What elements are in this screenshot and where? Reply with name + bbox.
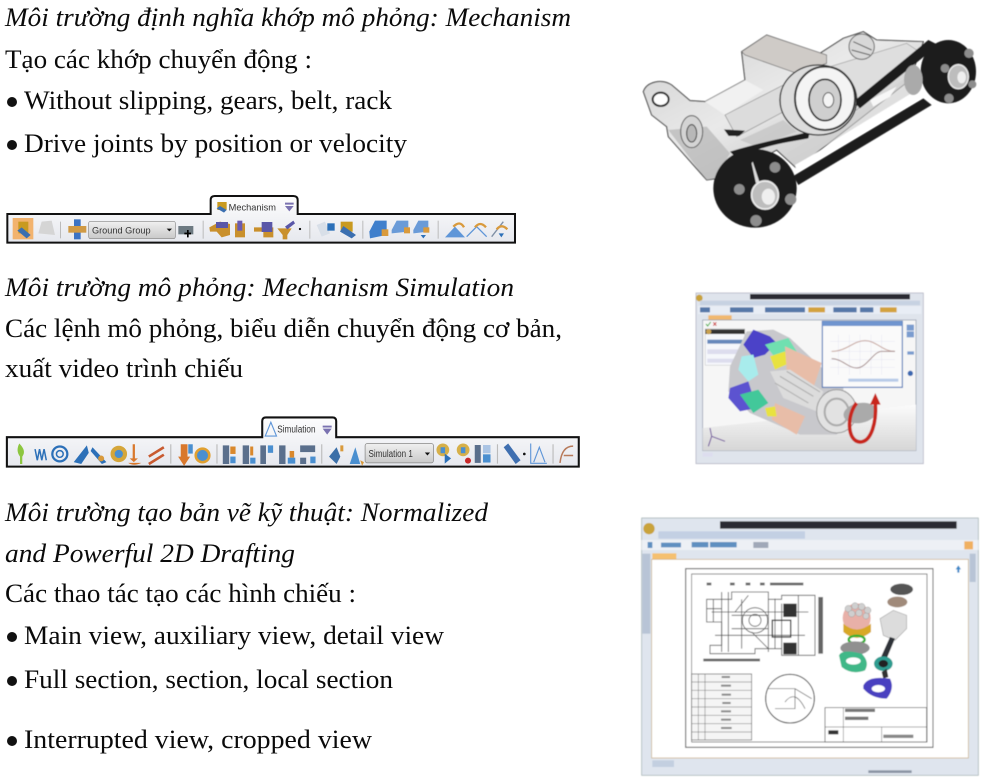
motor — [728, 330, 847, 435]
toolbar: Mechanism — [7, 196, 515, 243]
axes — [708, 428, 725, 446]
heading: Simulation: Môi trường mô phỏng: Mechanism Simulation — [4, 273, 514, 302]
description line 2: xuất video trình chiếu — [5, 354, 243, 383]
section view — [707, 592, 815, 655]
section 1 text: Mechanism — [4, 3, 571, 158]
combo: Ground Group — [89, 221, 175, 239]
small pulley — [921, 40, 976, 103]
chart window — [822, 321, 902, 387]
heading: Drafting line 2: and Powerful 2D Drafting — [5, 539, 295, 568]
detail circle — [766, 674, 814, 723]
combo: Simulation 1: Simulation 1 — [368, 449, 413, 460]
bullet: drive joints: Drive joints by position or velocity — [24, 129, 407, 158]
toolbar: Simulation — [7, 417, 579, 467]
image: drafting software window — [642, 518, 978, 775]
description line 1: Các lệnh mô phỏng, biểu diễn chuyển động cơ bản, — [5, 314, 562, 343]
dialog panel — [705, 329, 745, 365]
heading: Mechanism: Môi trường định nghĩa khớp mô phỏng: Mechanism — [4, 3, 571, 32]
tab label: Mechanism: Mechanism — [229, 203, 276, 213]
bullet: interrupted view: Interrupted view, cropped view — [24, 725, 372, 754]
parts table — [692, 674, 752, 740]
tab label: Simulation — [265, 422, 332, 436]
image: simulation software window — [696, 293, 923, 464]
combo: Simulation 1 — [365, 444, 433, 463]
subheading: views: Các thao tác tạo các hình chiếu : — [5, 579, 356, 608]
bullet: main view: Main view, auxiliary view, detail view — [24, 621, 444, 650]
belt lower — [793, 98, 932, 185]
heading: Drafting line 1: Môi trường tạo bản vẽ kỹ thuật: Normalized — [4, 498, 489, 527]
section 2 text: Simulation — [4, 273, 562, 383]
belt upper right — [853, 40, 938, 108]
tab label: Mechanism — [217, 202, 294, 213]
subheading: joints: Tạo các khớp chuyển động : — [5, 45, 312, 74]
title block — [825, 708, 927, 742]
bullet: without slipping: Without slipping, gears, belt, rack — [24, 86, 392, 115]
exploded 3D parts — [890, 584, 913, 595]
tab label: Simulation: Simulation — [277, 424, 316, 435]
red rotation arrow — [850, 403, 876, 442]
idler pulley — [780, 65, 857, 135]
belt upper left — [730, 132, 810, 158]
bullet: full section: Full section, section, local section — [24, 665, 393, 694]
large pulley — [713, 149, 797, 228]
drawing sheet — [686, 569, 933, 747]
image: belt drive mechanism — [643, 32, 976, 228]
combo: Ground Group: Ground Group — [92, 225, 151, 235]
section 3 text: Drafting — [4, 498, 489, 754]
